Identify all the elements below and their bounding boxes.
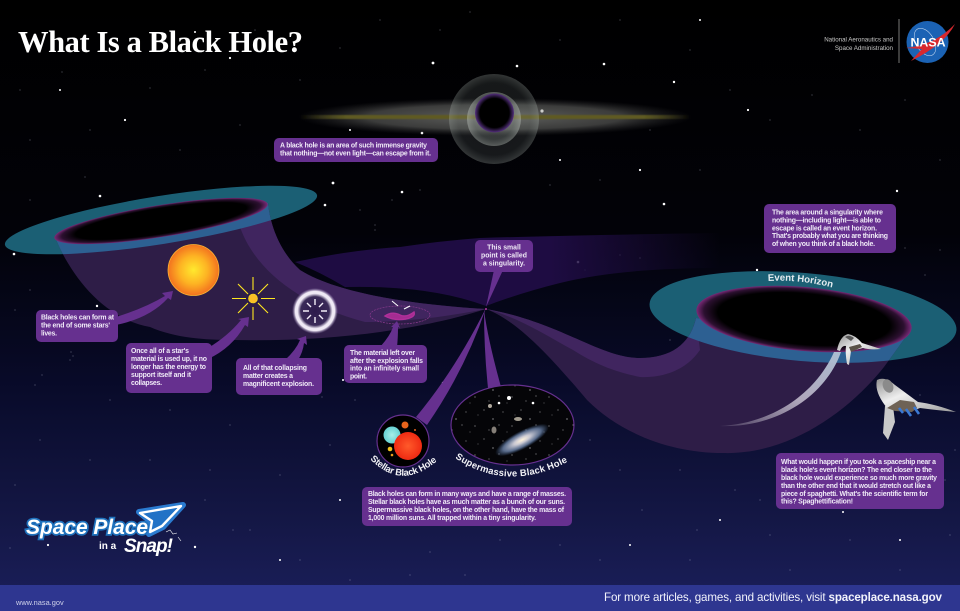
Space Place in a Snap logo bbox=[26, 505, 183, 557]
box: material left over bbox=[344, 345, 427, 383]
box: star collapses: support itself and it bbox=[131, 372, 192, 379]
box: what is a black hole: that nothing—not even light—can escape from it. bbox=[280, 150, 431, 158]
label: event horizon: Event Horizon bbox=[768, 274, 833, 288]
box: end of stars' lives bbox=[36, 310, 118, 342]
arrow: to stellar black hole bbox=[416, 308, 486, 425]
top black hole with accretion disk bbox=[298, 74, 692, 164]
arrow: swirl bbox=[380, 321, 400, 347]
box: what is a black hole bbox=[274, 138, 438, 162]
box: event horizon explanation: The area around a singularity where bbox=[772, 210, 883, 216]
box: spaghettification: piece of spaghetti. What's the scientific term for bbox=[781, 491, 928, 498]
box: explosion bbox=[236, 358, 322, 395]
box: what is a black hole: A black hole is an area of such immense gravity bbox=[280, 142, 427, 150]
left black hole mouth bbox=[52, 188, 270, 254]
box: explosion: All of that collapsing bbox=[243, 365, 307, 372]
arrow: form at end of lives bbox=[116, 291, 173, 325]
footer bar: For more articles, games, and activities, visit spaceplace.nasa.gov bbox=[604, 591, 943, 604]
box: range of masses bbox=[362, 487, 572, 526]
arrow: singularity pointer bbox=[486, 270, 503, 307]
divider near NASA logo bbox=[898, 19, 900, 63]
label: supermassive black hole: Supermassive Black Hole bbox=[456, 454, 567, 476]
box: star collapses: material is used up, it no bbox=[131, 356, 207, 363]
stellar black hole bbox=[377, 415, 429, 467]
footer bar: www.nasa.gov bbox=[15, 598, 64, 607]
box: event horizon explanation bbox=[764, 204, 896, 253]
box: spaghettification: black hole's event horizon? The end closer to the bbox=[781, 467, 932, 474]
singularity forming swirl bbox=[370, 301, 430, 324]
sun bbox=[168, 244, 219, 296]
footer bar bbox=[0, 585, 960, 611]
box: singularity: point is called bbox=[481, 252, 527, 260]
spaghettification trail bbox=[720, 352, 841, 426]
event horizon left: outer teal disk bbox=[1, 172, 321, 268]
Space Place in a Snap logo: Snap! bbox=[124, 536, 173, 557]
spaceship bbox=[876, 378, 956, 440]
funnel: back sheet bbox=[295, 233, 720, 306]
arrow: to supermassive black hole bbox=[484, 310, 501, 388]
box: star collapses: collapses. bbox=[131, 380, 162, 387]
box: range of masses: Black holes can form in many ways and have a range of masses. bbox=[368, 491, 566, 498]
NASA wordmark text: National Aeronautics and bbox=[824, 36, 894, 44]
box: star collapses: longer has the energy to bbox=[131, 364, 206, 371]
box: end of stars' lives: lives. bbox=[41, 330, 57, 338]
NASA logo: NASA bbox=[910, 36, 946, 50]
right black hole mouth bbox=[694, 278, 914, 360]
title: What Is a Black Hole? bbox=[18, 25, 303, 59]
Space Place in a Snap logo: in a bbox=[99, 541, 117, 552]
box: spaghettification bbox=[776, 453, 944, 509]
box: spaghettification: this? Spaghettification! bbox=[781, 498, 853, 506]
spaceship near horizon bbox=[837, 334, 881, 365]
NASA logo bbox=[906, 21, 955, 63]
box: explosion: magnificent explosion. bbox=[243, 381, 314, 388]
box: singularity: This small bbox=[487, 244, 521, 252]
label: stellar black hole: Stellar Black Hole bbox=[371, 456, 436, 476]
box: spaghettification: than the other end that it would stretch out like a bbox=[781, 483, 931, 490]
box: explosion: matter creates a bbox=[243, 373, 293, 380]
singularity point bbox=[485, 308, 487, 310]
collapsing star with arrows bbox=[232, 277, 275, 320]
box: event horizon explanation: That's probably what you are thinking bbox=[772, 233, 888, 240]
box: end of stars' lives: the end of some stars' bbox=[41, 322, 110, 330]
box: event horizon explanation: of when you think of a black hole. bbox=[772, 241, 875, 248]
box: range of masses: 1,000 million suns. All trapped within a tiny singularity. bbox=[368, 515, 536, 522]
arrow: explosion bbox=[285, 336, 307, 360]
box: end of stars' lives: Black holes can form at bbox=[41, 314, 115, 322]
funnel: right sheet bbox=[486, 309, 905, 453]
box: star collapses: Once all of a star's bbox=[131, 348, 189, 355]
box: singularity: a singularity. bbox=[483, 260, 525, 268]
funnel: left sheet bbox=[55, 203, 486, 340]
box: range of masses: Supermassive black holes, on the other hand, have the mass of bbox=[368, 507, 565, 514]
box: spaghettification: black hole would experience so much more gravity bbox=[781, 475, 937, 482]
supermassive black hole with galaxy bbox=[450, 384, 576, 466]
box: singularity bbox=[475, 240, 533, 272]
box: material left over: The material left over bbox=[350, 350, 415, 357]
box: range of masses: Stellar black holes have as much matter as a bunch of our suns. bbox=[368, 499, 565, 506]
box: spaghettification: What would happen if you took a spaceship near a bbox=[781, 459, 936, 466]
box: star collapses bbox=[126, 343, 212, 393]
explosion bbox=[292, 288, 338, 334]
arrow: star collapses bbox=[208, 317, 249, 359]
NASA wordmark text: Space Administration bbox=[835, 45, 894, 52]
box: event horizon explanation: escape is called an event horizon. bbox=[772, 226, 877, 232]
event horizon right: outer teal disk bbox=[646, 260, 960, 374]
box: material left over: into an infinitely small bbox=[350, 366, 419, 372]
Space Place in a Snap logo: Space Place bbox=[26, 516, 148, 539]
box: material left over: after the explosion falls bbox=[350, 358, 423, 365]
box: material left over: point. bbox=[350, 374, 367, 380]
box: event horizon explanation: nothing—including light—is able to bbox=[772, 218, 881, 224]
